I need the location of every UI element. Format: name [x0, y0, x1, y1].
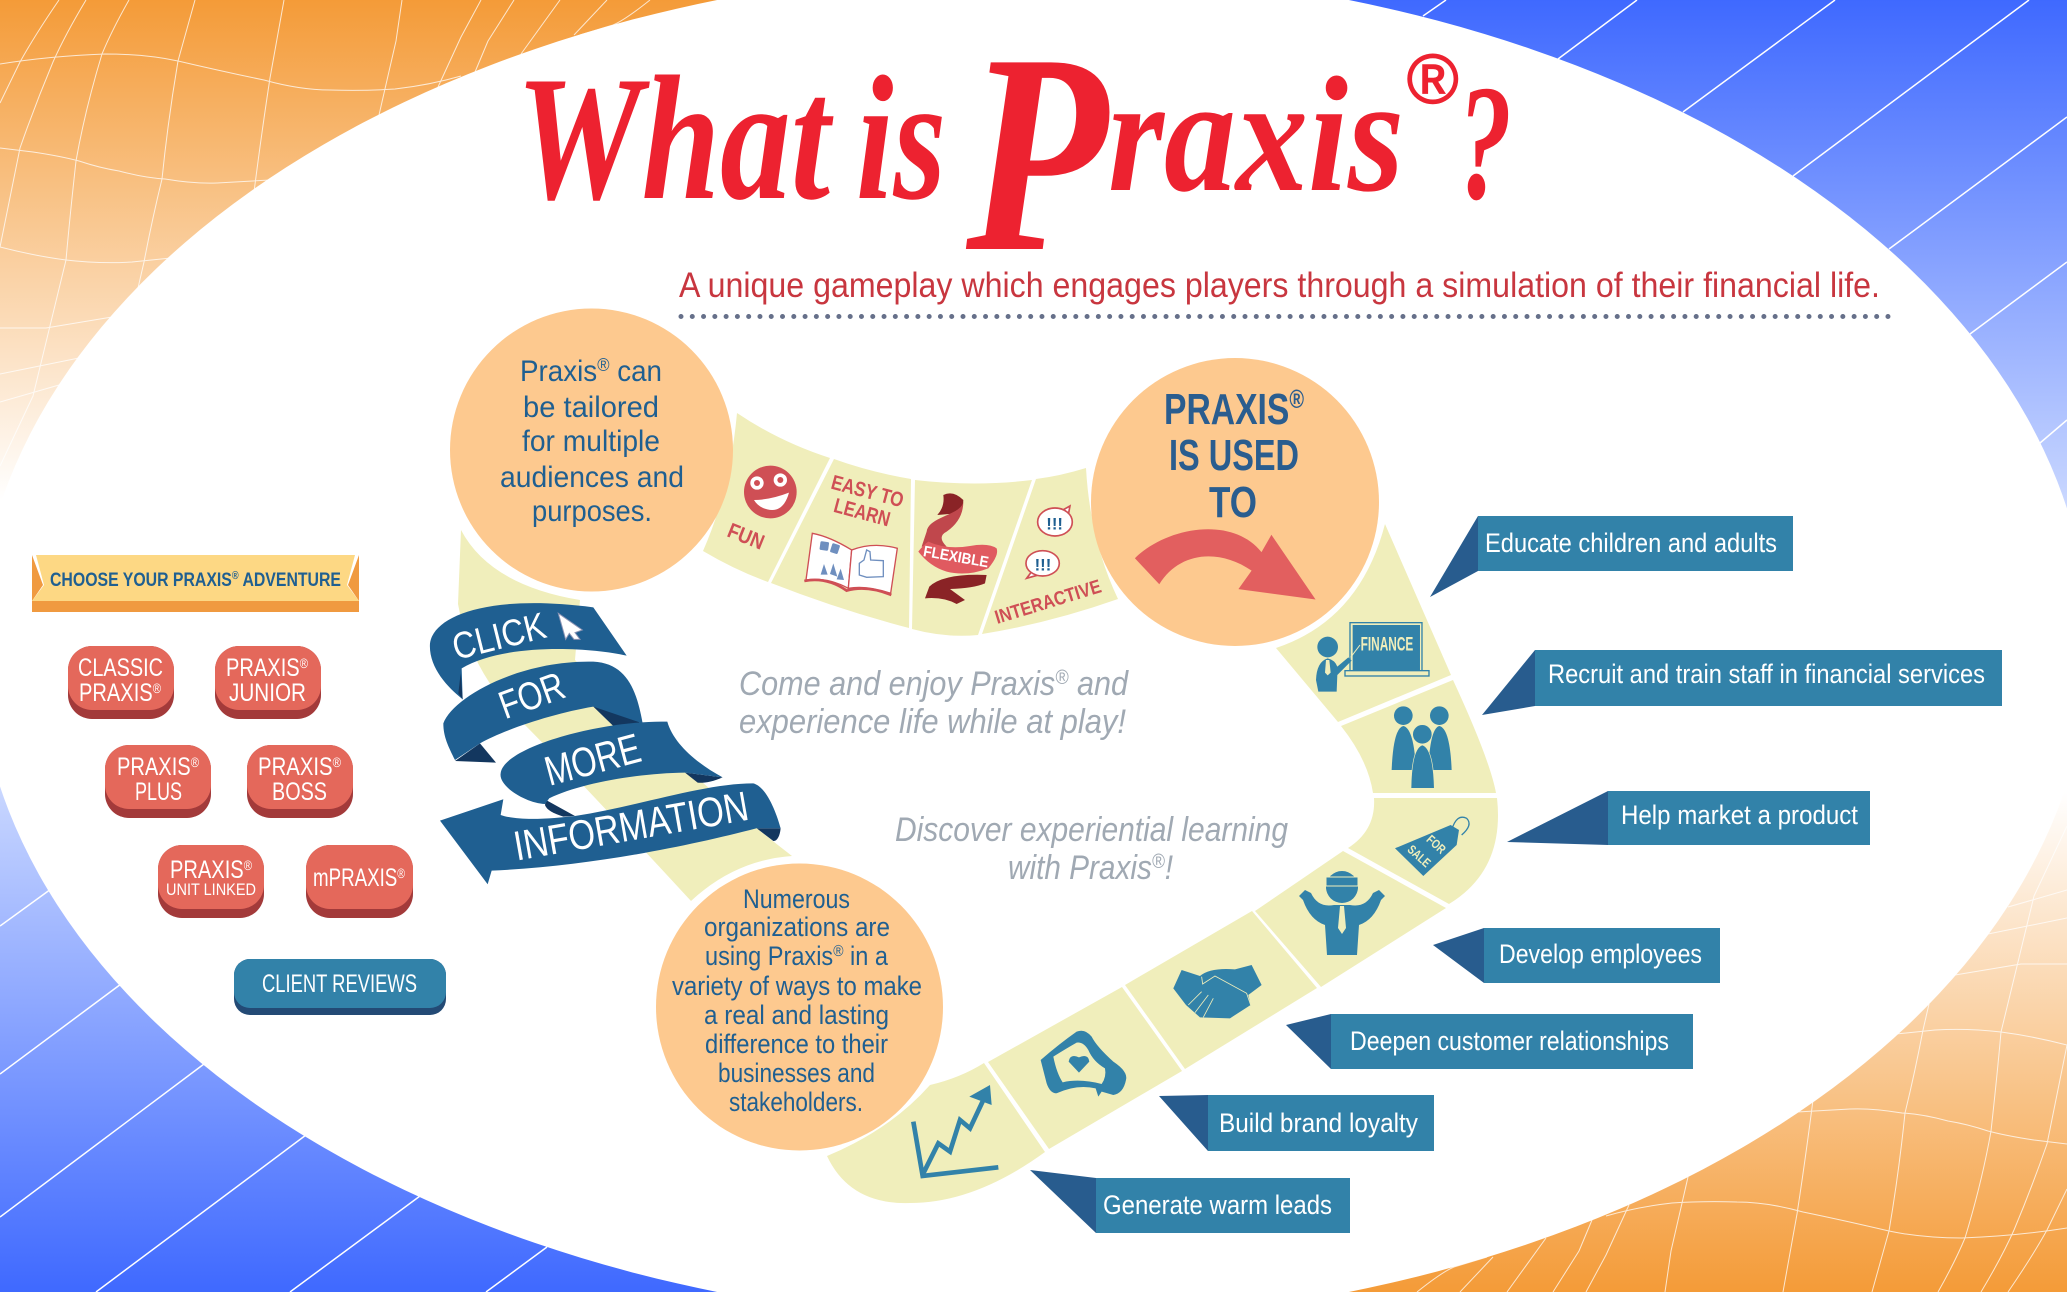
tile: for sale: FOR [1424, 832, 1448, 857]
circle: numerous organizations: Numerous [743, 884, 850, 914]
button: praxis boss: ® [333, 754, 342, 770]
button: client reviews [234, 959, 446, 1015]
callout: recruit: Recruit and train staff in financial services [1548, 659, 1985, 689]
tile: easy to learn: EASY TO [829, 471, 906, 512]
tile: interactive: !!! [1035, 556, 1051, 575]
tagline: come and enjoy: experience life while at play! [739, 703, 1127, 741]
callout: generate [1030, 1170, 1350, 1233]
ribbon: click for more information: MORE [539, 724, 646, 795]
button: praxis plus: PLUS [135, 778, 182, 806]
tile: develop employees [1255, 851, 1446, 987]
dotted underline [681, 314, 1890, 319]
circle: tailored audiences [450, 308, 733, 592]
ribbon: click for more information: CLICK [448, 604, 550, 668]
tagline: come and enjoy: ® [1055, 667, 1069, 689]
game track: top band with feature tiles [703, 413, 1118, 636]
tile: flexible [912, 480, 1032, 636]
circle: tailored audiences: Praxis [520, 355, 603, 388]
tile: easy to learn [771, 459, 911, 628]
callout: deepen: Deepen customer relationships [1350, 1026, 1669, 1056]
tile: brand loyalty [988, 987, 1182, 1149]
tile: for sale [1348, 798, 1498, 904]
button: praxis boss: BOSS [272, 778, 327, 806]
subtitle: A unique gameplay which engages players through a simulation of their financial life. [679, 266, 1880, 305]
tagline: come and enjoy: Come and enjoy Praxis [739, 665, 1091, 703]
icon: curved arrow [1135, 529, 1316, 599]
tagline: come and enjoy [739, 665, 1129, 741]
circle: Praxis is used to: PRAXIS [1164, 385, 1328, 434]
banner: choose your adventure: ADVENTURE [239, 570, 341, 591]
circle: numerous organizations: difference to their [705, 1029, 888, 1059]
game track: left vertical band [458, 530, 792, 901]
callout: build: Build brand loyalty [1219, 1108, 1418, 1138]
circle: Praxis is used to [1091, 358, 1379, 646]
circle: numerous organizations: businesses and [718, 1058, 875, 1088]
button: mpraxis [306, 845, 413, 918]
callout: educate [1430, 516, 1793, 597]
button: praxis unit linked [158, 845, 264, 918]
tile: for sale: SALE [1405, 842, 1433, 870]
tagline: discover experiential learning: ! [1165, 849, 1173, 887]
tile: warm leads [827, 1063, 1045, 1203]
circle: tailored audiences: can [609, 355, 662, 388]
ribbon: click for more information: FOR [493, 664, 571, 728]
button: praxis boss [247, 745, 353, 818]
tagline: discover experiential learning: ® [1152, 851, 1165, 873]
button: praxis unit linked: ® [244, 857, 253, 873]
circle: numerous organizations: using Praxis [705, 941, 852, 971]
title: ® [1407, 40, 1459, 118]
callout: generate: Generate warm leads [1103, 1190, 1332, 1220]
callout: recruit [1482, 650, 2002, 715]
tagline: come and enjoy: and [1068, 665, 1129, 703]
callout: develop [1433, 928, 1720, 983]
tagline: discover experiential learning [895, 811, 1288, 887]
tile: staff [1341, 680, 1496, 793]
button: praxis plus [105, 745, 211, 818]
button: mpraxis: mPRAXIS [313, 864, 426, 892]
title [516, 0, 1512, 311]
circle: numerous organizations: ® [833, 943, 844, 960]
circle: tailored audiences: ® [597, 355, 609, 375]
product buttons [68, 646, 446, 1015]
banner: choose your adventure [32, 555, 359, 612]
button: praxis unit linked: UNIT LINKED [166, 880, 256, 899]
button: praxis boss: PRAXIS [258, 753, 350, 781]
button: praxis junior: JUNIOR [229, 679, 306, 707]
callout: develop: Develop employees [1499, 939, 1702, 969]
circle: numerous organizations: in a [843, 941, 889, 971]
button: praxis junior: PRAXIS [226, 654, 318, 682]
tile: easy to learn: LEARN [831, 494, 893, 531]
title: What [516, 39, 834, 237]
button: praxis unit linked: PRAXIS [170, 856, 262, 884]
tile: interactive [982, 468, 1118, 634]
circle: tailored audiences: purposes. [532, 495, 652, 528]
circle: tailored audiences: audiences and [500, 461, 684, 494]
callout: build [1159, 1095, 1434, 1151]
button: praxis plus: ® [191, 754, 200, 770]
ribbon: click for more information: INFORMATION [510, 782, 752, 870]
title: P [962, 0, 1111, 311]
ribbon: click for more information [430, 603, 781, 884]
button: classic praxis [68, 646, 174, 719]
tagline: discover experiential learning: with Praxis [1008, 849, 1172, 887]
circle: numerous organizations: organizations are [704, 912, 890, 942]
game track: right band with use-case tiles [827, 524, 1498, 1203]
button: praxis junior: ® [300, 655, 309, 671]
circle: Praxis is used to: ® [1289, 384, 1304, 414]
circle: tailored audiences: be tailored [523, 391, 659, 424]
button: client reviews: CLIENT REVIEWS [262, 970, 417, 998]
circle: Praxis is used to: TO [1209, 478, 1257, 527]
title: raxis [1108, 43, 1404, 226]
tile: flexible: FLEXIBLE [922, 543, 990, 571]
button: classic praxis: PRAXIS [79, 679, 171, 707]
tile: fun [703, 413, 830, 582]
banner: choose your adventure: ® [232, 570, 239, 582]
button: praxis plus: PRAXIS [117, 753, 209, 781]
tile: finance: FINANCE [1361, 635, 1413, 656]
callout: educate: Educate children and adults [1485, 528, 1777, 558]
callout: help market [1507, 791, 1870, 845]
tile: interactive: !!! [1046, 514, 1063, 533]
button: classic praxis: CLASSIC [78, 654, 163, 682]
tagline: discover experiential learning: Discover experiential learning [895, 811, 1288, 849]
circle: tailored audiences: for multiple [522, 425, 660, 458]
tile: finance [1276, 524, 1451, 722]
button: praxis junior [215, 646, 321, 719]
circle: numerous organizations: variety of ways to make [672, 971, 922, 1001]
tile: fun: FUN [724, 518, 768, 555]
circle: numerous organizations: a real and lasting [704, 1000, 889, 1030]
tile: interactive: INTERACTIVE [993, 576, 1104, 629]
callout: deepen [1286, 1014, 1693, 1069]
tile: handshake [1125, 911, 1317, 1069]
button: mpraxis: ® [397, 865, 406, 881]
banner: choose your adventure: CHOOSE YOUR PRAXIS [50, 570, 268, 591]
circle: numerous organizations: stakeholders. [729, 1087, 863, 1117]
callouts [1030, 516, 2002, 1233]
title: is [856, 39, 946, 237]
icon: cursor [558, 613, 582, 639]
circle: numerous organizations [656, 864, 943, 1150]
title: ? [1458, 51, 1512, 234]
circle: Praxis is used to: IS USED [1169, 431, 1299, 480]
button: classic praxis: ® [153, 680, 162, 696]
callout: help market: Help market a product [1621, 800, 1858, 830]
